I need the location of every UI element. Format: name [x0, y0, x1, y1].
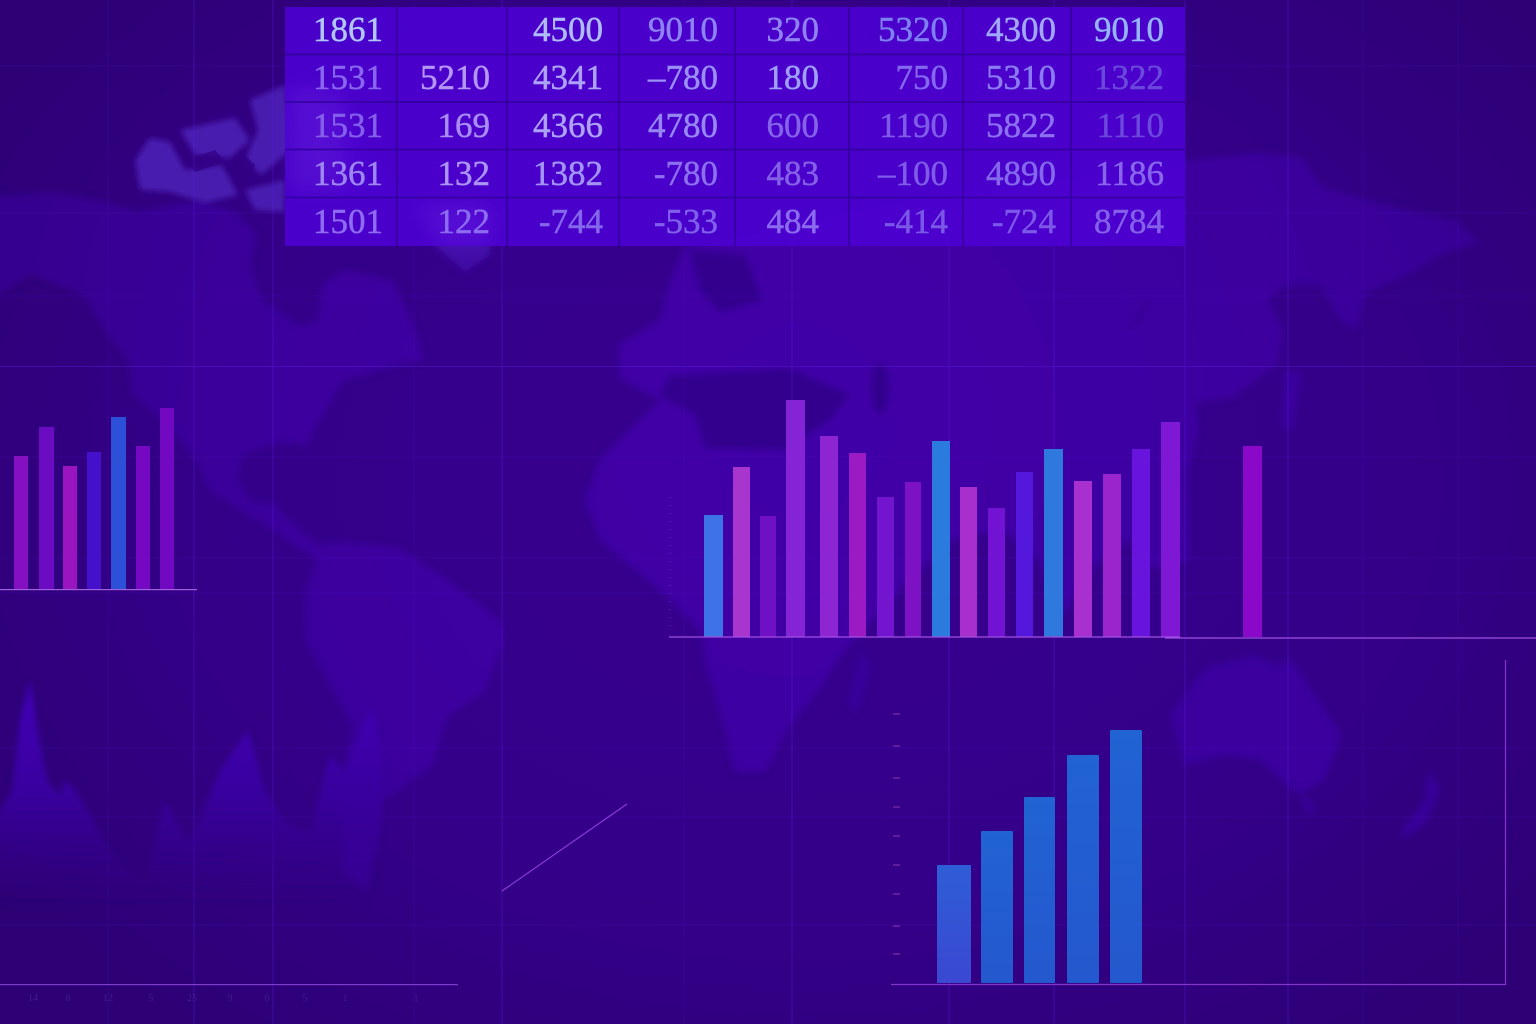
area chart axis labels: [28, 993, 418, 1004]
area chart axis labels: 6: [264, 993, 270, 1004]
map: greenland: [285, 85, 490, 272]
table row 2: [313, 58, 1164, 97]
table row 1: 4500: [533, 10, 603, 49]
map: north and south america: [0, 192, 505, 890]
table row 5: -724: [992, 202, 1056, 241]
table row 1: 9010: [1094, 10, 1164, 49]
table row 4: 1361: [313, 154, 383, 193]
world map: [0, 85, 1479, 890]
table row 3: [313, 106, 1164, 145]
area chart axis labels: 1: [414, 993, 418, 1004]
table row 1: [313, 10, 1164, 49]
table row 2: –780: [647, 58, 718, 97]
table row 1: 9010: [648, 10, 718, 49]
table row 5: 1501: [313, 202, 383, 241]
table row 2: 5210: [420, 58, 490, 97]
center chart faint axis ticks: [669, 497, 671, 632]
table row 2: 1531: [313, 58, 383, 97]
table row 5: 484: [766, 202, 819, 241]
table cell lines: [285, 7, 1185, 246]
table row 5: 8784: [1094, 202, 1164, 241]
table row 4: -780: [654, 154, 718, 193]
area chart axis labels: 8: [66, 993, 70, 1004]
left chart bars: [14, 408, 174, 589]
area chart: bottom left: [0, 680, 382, 905]
table row 3: 1531: [313, 106, 383, 145]
table row 4: 4890: [986, 154, 1056, 193]
area chart axis: [0, 984, 458, 1004]
table row 5: [313, 202, 1164, 241]
map: australia: [1170, 655, 1342, 795]
table row 3: 4780: [648, 106, 718, 145]
table row 2: 180: [766, 58, 819, 97]
table row 3: 4366: [533, 106, 603, 145]
bar chart: bottom right: [891, 660, 1506, 984]
table row 2: 750: [896, 58, 948, 97]
map: madagascar: [848, 650, 872, 712]
table row 4: 1186: [1095, 154, 1164, 193]
table row 3: 1110: [1097, 106, 1164, 145]
map: eurasia and africa: [585, 153, 1479, 772]
area chart axis labels: 1: [342, 993, 348, 1004]
map: islands of asia: [1282, 370, 1302, 430]
area chart axis labels: 5: [148, 993, 154, 1004]
table row 4: –100: [877, 154, 948, 193]
table row 3: 1190: [879, 106, 948, 145]
area chart axis labels: 12: [103, 993, 113, 1004]
table row 3: 169: [438, 106, 490, 145]
table row 3: 5822: [986, 106, 1056, 145]
table map glow: [290, 85, 490, 246]
area chart axis labels: 14: [28, 993, 38, 1004]
table row 5: 122: [438, 202, 490, 241]
table row 4: 132: [438, 154, 490, 193]
map: arctic islands: [135, 85, 290, 212]
table row 2: 1322: [1094, 58, 1164, 97]
table background: [285, 7, 1185, 246]
table row 4: 1382: [533, 154, 603, 193]
bar chart: center: [669, 400, 1536, 638]
table row 3: 600: [766, 106, 819, 145]
table row 1: 5320: [878, 10, 948, 49]
map: dark seas: [660, 250, 1150, 450]
center chart axis: [669, 637, 1536, 638]
bottom chart bars: [937, 730, 1142, 983]
bottom chart frame: [891, 660, 1506, 984]
area chart axis labels: 25: [187, 993, 197, 1004]
bottom chart ticks: [893, 714, 900, 954]
table row 1: 320: [766, 10, 819, 49]
center chart bars: [704, 400, 1262, 637]
area chart axis labels: 5: [302, 993, 308, 1004]
table row 1: 1861: [313, 10, 383, 49]
diagonal line: [502, 804, 627, 891]
data table: [285, 7, 1185, 246]
table row 4: [313, 154, 1164, 193]
table row 1: 4300: [986, 10, 1056, 49]
table row 5: -414: [884, 202, 948, 241]
table row 5: -533: [654, 202, 718, 241]
table row 4: 483: [766, 154, 819, 193]
table row 2: 4341: [533, 58, 603, 97]
area chart axis labels: 9: [228, 993, 232, 1004]
table row 5: -744: [539, 202, 603, 241]
map: tasmania and new zealand: [1300, 770, 1440, 840]
left chart axis: [0, 589, 197, 590]
bar chart: left: [0, 408, 197, 590]
table row 2: 5310: [986, 58, 1056, 97]
